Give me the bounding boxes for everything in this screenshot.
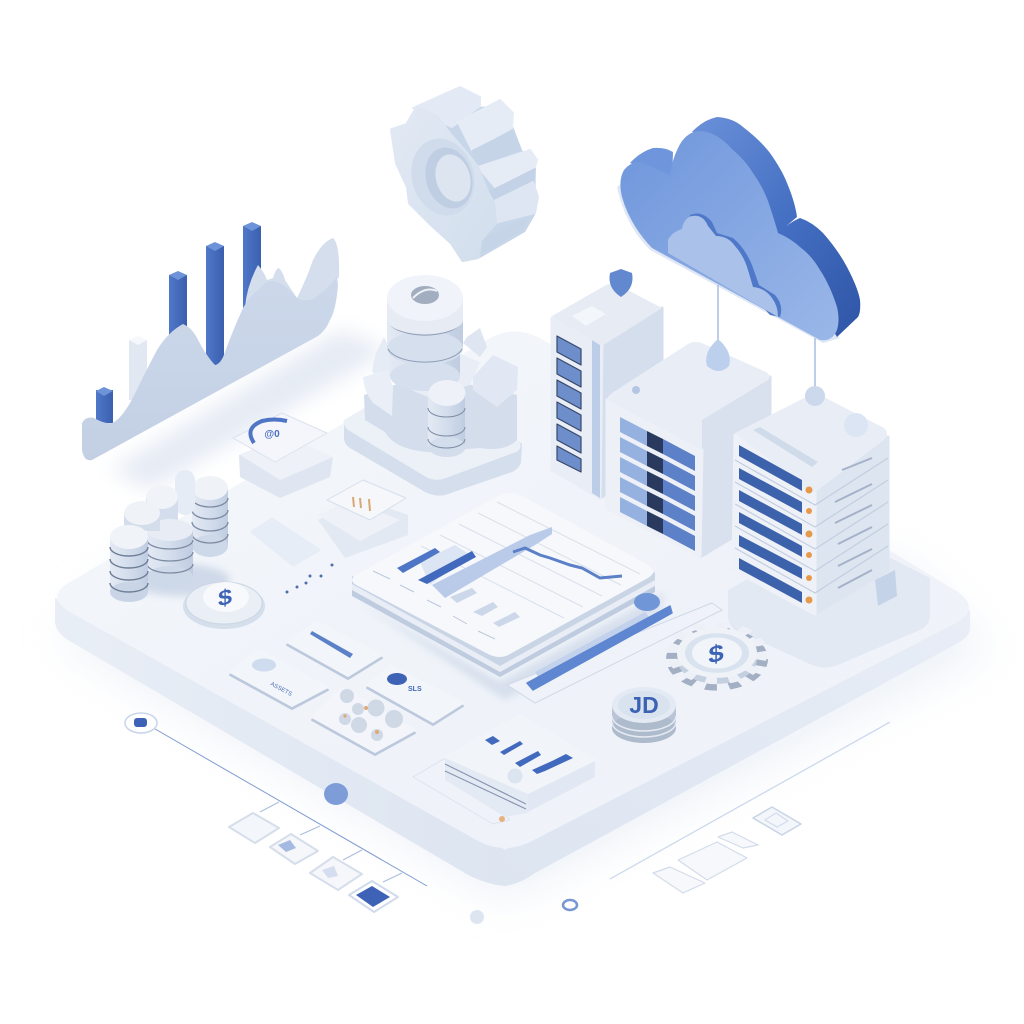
trend line [513,548,622,578]
top face [607,342,770,450]
left face [733,435,815,614]
gear hub inner [418,142,480,214]
middle plate [393,352,480,398]
top face [552,284,662,346]
top handle [753,427,818,467]
ui card right: SLS [408,686,422,693]
upper cylinder [387,298,463,348]
grid lines [421,502,640,618]
top sheet [352,493,653,657]
solid icon [349,881,398,912]
right face [700,377,770,557]
server rack 2 [607,339,770,557]
orange status lights [806,486,812,604]
coin D: JD [629,692,659,718]
card knob [508,768,522,784]
gear tooth 4 [490,182,538,223]
coin D [612,687,676,743]
bar 4 [206,242,224,368]
front stack [110,525,148,602]
amber accents [343,706,379,734]
layer separators [735,458,888,593]
outline icon 3 [310,857,362,890]
drawer 5 [620,497,695,551]
small stack [428,395,465,447]
right large facet [473,355,518,407]
gear gap 2 [487,168,535,203]
glass panel [252,519,319,565]
gear hub ring [402,131,484,223]
main line [143,722,427,886]
bar 2 white [129,336,147,400]
top dot [632,386,640,394]
coin dollar: $ [218,584,233,612]
sheet lines [445,764,526,809]
area shadow [110,330,390,490]
raised base under server 3 [728,530,930,668]
right face [815,437,888,614]
top coin emblem [411,286,439,304]
slider bar [527,606,672,690]
platform left side [55,598,505,886]
drawer 1 [620,417,695,471]
ui card left: ASSETS [269,681,293,698]
platform shadow [60,560,990,900]
drawer 2 [620,437,695,491]
cloud bottom rim [617,170,840,343]
ring icon: @0 [264,429,280,440]
bar 1 [96,387,113,423]
chart bars [397,548,440,573]
coin dollar [183,582,265,629]
cloud left extrusion [630,148,673,180]
report shadow [355,592,665,700]
mountain back lobe [245,238,339,320]
branches [260,802,402,882]
cloud [617,117,860,343]
outline icon 1 [229,813,279,843]
left coin [124,501,160,531]
gear hub core [430,150,476,206]
blue drop [324,783,348,805]
slider knob [634,593,660,611]
slots [557,336,581,472]
small ring [563,900,577,910]
mountain face [82,277,338,460]
cloud front face [620,131,838,340]
top coin [146,485,178,525]
small dot [470,910,484,924]
ui card top [287,622,382,679]
teardrop connector [706,339,730,371]
coin tower on base [344,275,522,496]
card box with ring icon [233,413,333,498]
chart: mountain area with bars [82,222,390,490]
inner small cloud [668,216,778,317]
glass band [535,612,650,680]
back right stack [192,476,228,557]
emblem stripe [413,290,437,298]
base [344,372,522,496]
left face [552,318,602,498]
middle cylinder [390,340,460,376]
ui card left [230,650,328,709]
right vents [835,458,872,588]
middle pile [147,519,193,588]
connector tree bottom left [125,713,427,912]
report stack with chart [352,493,665,700]
coin stacks left [110,470,230,602]
start node [125,713,157,733]
ui card right [367,665,463,725]
keyboard [678,842,747,880]
drawer 4 [620,477,695,531]
top plate [572,306,606,326]
gear coin: $ [708,638,724,669]
gear coin [674,626,760,686]
gear tooth 1 [413,87,480,127]
panel: isometric platform [55,332,970,886]
stacked chart card [413,715,595,824]
top face [735,395,887,492]
upper right facet [463,328,487,357]
blades [739,445,802,603]
icon: gear [392,87,538,260]
x ticks [373,571,495,639]
card bars [485,736,573,774]
copper pins [353,497,370,511]
amber edge [499,816,505,822]
screen icon [753,807,801,835]
pearl tray [312,688,415,755]
top knobs [805,386,825,406]
sheets [445,758,528,817]
left facet [363,370,393,416]
gear tooth 3 [478,150,537,187]
cloud connector lines [718,285,815,390]
card top [445,715,595,793]
side strip [592,340,600,498]
shield icon [609,269,633,297]
inner cloud shadow [690,214,781,317]
stacks shadow [130,564,230,596]
pearls [339,689,403,741]
gear tooth 2 [458,100,513,150]
back left facet [372,337,390,385]
pale pill [175,470,195,515]
slider tray [507,593,722,703]
card side [528,760,595,812]
tray [413,757,510,824]
glass card stack [318,480,408,558]
dotted trail [286,564,334,594]
chart band [432,527,552,598]
outline icon 2 [270,834,318,864]
platform top surface [57,332,969,848]
drawer 3 [620,457,695,511]
bar 5 [243,222,261,310]
left face [607,400,702,557]
right face [600,308,662,498]
server rack 1 [552,269,662,498]
gear gap 1 [472,130,522,167]
cloud back extrusion [692,117,860,337]
sheets [352,578,655,677]
bar 3 [169,271,187,335]
top disc [387,275,463,321]
keyboard line art bottom right [610,722,890,893]
server rack 3 [733,386,888,614]
platform right side [505,610,970,886]
baseline [610,722,890,879]
lower body [364,375,517,452]
gear tooth 5 [480,217,528,255]
gear body [440,105,536,258]
gear face [392,108,495,260]
